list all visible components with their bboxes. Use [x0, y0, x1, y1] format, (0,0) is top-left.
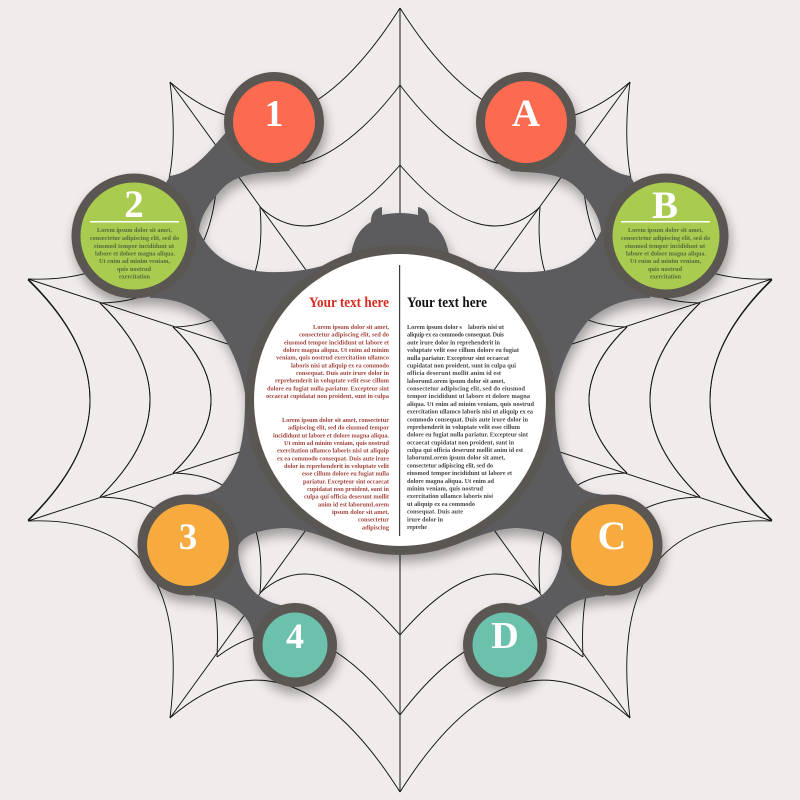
right text block: voluptate velit esse cillum dolore eu fugiat	[407, 347, 520, 354]
right text block: dolore magna aliqua. Ut enim ad	[407, 478, 494, 485]
left text block 1: veniam, quis nostrud exercitation ullamco	[276, 355, 389, 362]
right text block: aliqua. Ut enim ad minim veniam, quis nostrud	[407, 401, 534, 408]
right text block: nulla pariatur. Excepteur sint occaecat	[407, 355, 510, 362]
left text block 1: eiusmod tempor incididunt ut labore et	[284, 339, 390, 346]
node 2: consectetur adipiscing elit, sed do	[90, 236, 179, 242]
bug head	[350, 207, 450, 262]
left text block 1: occaecat cupidatat non proident, sunt in culpa	[266, 393, 390, 400]
right text block: exercitation ullamco laboris nisi	[407, 493, 493, 500]
node 1	[233, 81, 315, 163]
left text block 1: consectetur adipiscing elit, sed do	[299, 332, 389, 339]
node 2: 2	[124, 183, 144, 226]
left text block 2: Lorem ipsum dolor sit amet, consectetur	[282, 417, 389, 424]
left text block 1: reprehenderit in voluptate velit esse cillum	[275, 378, 390, 385]
node B: eiusmod tempor incididunt ut	[625, 244, 705, 250]
left text block 2: ipsum dolor sit amet,	[332, 509, 389, 516]
node 2: labore et dolore magna aliqua.	[95, 252, 175, 258]
right text block: aute irure dolor in reprehenderit in	[407, 339, 500, 346]
left text block 2	[273, 417, 390, 531]
right text block: reprehenderit in voluptate velit esse cillum	[407, 424, 521, 431]
center divider	[399, 265, 400, 536]
right text block: Lorem ipsum dolor s laboris nisi ut	[407, 324, 505, 331]
node 2: exercitation	[119, 274, 151, 280]
left text block 2: ex ea commodo consequat. Duis aute irure	[277, 455, 389, 462]
node 2: Lorem ipsum dolor sit amet,	[97, 228, 172, 234]
right text block: dolore eu fugiat nulla pariatur. Excepteur sint	[407, 432, 529, 439]
left text block 2: Ut enim ad minim veniam, quis nostrud	[284, 440, 389, 447]
node 2: quis nostrud	[117, 267, 152, 273]
arms: lower right	[400, 400, 612, 645]
right text block: reprehe	[407, 524, 427, 531]
left text block 1: Lorem ipsum dolor sit amet,	[313, 324, 389, 331]
node B: Lorem ipsum dolor sit amet,	[628, 228, 703, 234]
left text block 2: adipiscing elit, sed do eiusmod tempor	[288, 425, 389, 432]
right text block: irure dolor in	[407, 516, 443, 523]
arms: upper right	[400, 122, 666, 400]
right text block: minim veniam, quis nostrud	[407, 486, 483, 492]
node 2	[80, 182, 188, 290]
node A: A	[512, 92, 540, 135]
node 2: Ut enim ad minim veniam,	[99, 259, 170, 265]
node B: consectetur adipiscing elit, sed do	[621, 236, 710, 242]
left text block 1: laboris nisi ut aliquip ex ea commodo	[291, 362, 389, 369]
left text block 1: dolore magna aliqua. Ut enim ad minim	[283, 347, 390, 354]
right text block: consequat. Duis aute	[407, 509, 463, 516]
node D: D	[491, 615, 519, 657]
right text block: consectetur adipiscing elit, sed do	[407, 462, 493, 469]
right text block: exercitation ullamco laboris nisi ut aliquip ex ea	[407, 409, 534, 416]
left text block 2: cupidatat non proident, sunt in	[307, 486, 389, 493]
arms: upper left	[134, 122, 400, 400]
right text block: consectetur adipiscing elit, sed do eiusmod	[407, 386, 525, 392]
node 4: 4	[286, 616, 304, 656]
right text block: culpa qui officia deserunt mollit anim id est	[407, 447, 524, 454]
node 1: 1	[264, 93, 284, 135]
right text block: eiusmod tempor incididunt ut labore et	[407, 470, 513, 477]
central ring	[245, 245, 555, 555]
node D	[472, 612, 538, 678]
node B	[612, 182, 720, 290]
dark connector body	[72, 72, 728, 687]
node B: exercitation	[650, 274, 682, 280]
central white panel	[254, 254, 546, 546]
right text block: tempor incididunt ut labore et dolore magna	[407, 393, 531, 400]
left text block 2: esse cillum dolore eu fugiat nulla	[302, 471, 390, 478]
right text block: occaecat cupidatat non proident, sunt in	[407, 439, 514, 446]
left text block 1: dolore eu fugiat nulla pariatur. Excepteur sint	[267, 385, 390, 392]
node 2: eiusmod tempor incididunt ut	[94, 244, 174, 250]
node 4	[262, 612, 328, 678]
left text block 2: incididunt ut labore et dolore magna aliqua.	[273, 432, 389, 439]
left text block 1: consequat. Duis aute irure dolor in	[296, 370, 389, 377]
right text block: cupidatat non proident, sunt in culpa qui	[407, 362, 516, 370]
left text block 2: culpa qui officia deserunt mollit	[304, 494, 390, 501]
left text block 2: exercitation ullamco laboris nisi ut aliquip	[277, 448, 389, 455]
node 3	[147, 504, 229, 586]
left text block 2: consectetur	[358, 517, 389, 524]
left text block 2: dolor in reprehenderit in voluptate velit	[284, 463, 390, 470]
right text block: laborumLorem ipsum dolor sit amet,	[407, 455, 505, 462]
node 3: 3	[179, 517, 197, 558]
node B: Ut enim ad minim veniam,	[630, 259, 701, 265]
right text block: ut aliquip ex ea commodo	[407, 501, 475, 508]
right text block: aliquip ex ea commodo consequat. Duis	[407, 332, 505, 339]
node B: quis nostrud	[648, 267, 683, 273]
right text block: commodo consequat. Duis aute irure dolor in	[407, 416, 528, 423]
right heading: Your text here	[407, 295, 488, 311]
right text block: laborumLorem ipsum dolor sit amet,	[407, 378, 505, 385]
arms: lower left	[188, 400, 400, 645]
node C: C	[598, 513, 626, 558]
left text block 1	[266, 324, 390, 400]
left text block 2: adipiscing	[362, 524, 390, 531]
node C	[571, 504, 653, 586]
left heading: Your text here	[309, 295, 390, 311]
left text block 2: anim id est laborumLorem	[318, 501, 390, 508]
right text block: officia deserunt mollit anim id est	[407, 370, 502, 377]
right text block	[407, 324, 534, 531]
node B: labore et dolore magna aliqua.	[626, 252, 706, 258]
left text block 2: pariatur. Excepteur sint occaecat	[303, 478, 390, 485]
node rings	[72, 72, 728, 687]
node A	[485, 81, 567, 163]
node B: B	[652, 184, 678, 227]
